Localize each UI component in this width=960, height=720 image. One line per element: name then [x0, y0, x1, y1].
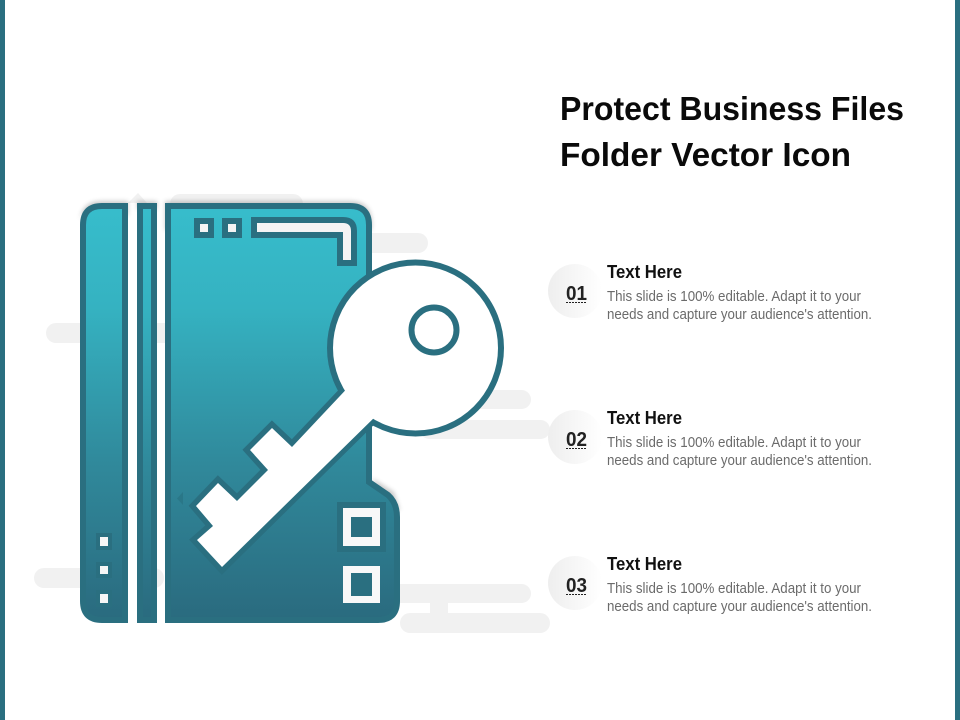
title [560, 90, 904, 173]
title: Folder Vector Icon [560, 136, 851, 173]
top label bracket [251, 217, 357, 266]
small triangle mark [177, 492, 183, 505]
item 03 description [607, 580, 872, 615]
key hole [412, 308, 456, 352]
key shaft [196, 380, 380, 567]
item 02 [548, 408, 872, 469]
item 01 description: This slide is 100% editable. Adapt it to your [607, 288, 861, 305]
item 03 description: needs and capture your audience's attention. [607, 598, 872, 615]
item 01 description: needs and capture your audience's attention. [607, 306, 872, 323]
left border bar [0, 0, 5, 720]
item 03 description: This slide is 100% editable. Adapt it to your [607, 580, 861, 597]
number badge 01 [548, 264, 602, 318]
number badge 02: 02 [566, 429, 587, 451]
item 01 heading: Text Here [607, 262, 682, 282]
key head [330, 262, 501, 434]
item 03 [548, 554, 872, 615]
folder icon [80, 201, 400, 620]
top label squares [194, 218, 242, 238]
folder spine strip [140, 206, 154, 620]
item 03 heading: Text Here [607, 554, 682, 574]
title: Protect Business Files [560, 90, 904, 127]
folder main panel [168, 206, 397, 620]
key shaft outline [196, 390, 372, 567]
number badge 03 [548, 556, 602, 610]
folder shadow [80, 201, 400, 510]
number badge 01: 01 [566, 283, 587, 305]
number badge 02 [548, 410, 602, 464]
item 01 [548, 262, 872, 323]
item 02 heading: Text Here [607, 408, 682, 428]
background speed lines [34, 193, 550, 633]
item 02 description: needs and capture your audience's attention. [607, 452, 872, 469]
number badge 03: 03 [566, 575, 587, 597]
right border bar [955, 0, 960, 720]
key icon [196, 262, 501, 567]
folder left panel [83, 206, 125, 620]
item 02 description [607, 434, 872, 469]
item 01 description [607, 288, 872, 323]
item 02 description: This slide is 100% editable. Adapt it to your [607, 434, 861, 451]
left panel dots [96, 533, 112, 607]
bottom right squares [337, 502, 386, 603]
